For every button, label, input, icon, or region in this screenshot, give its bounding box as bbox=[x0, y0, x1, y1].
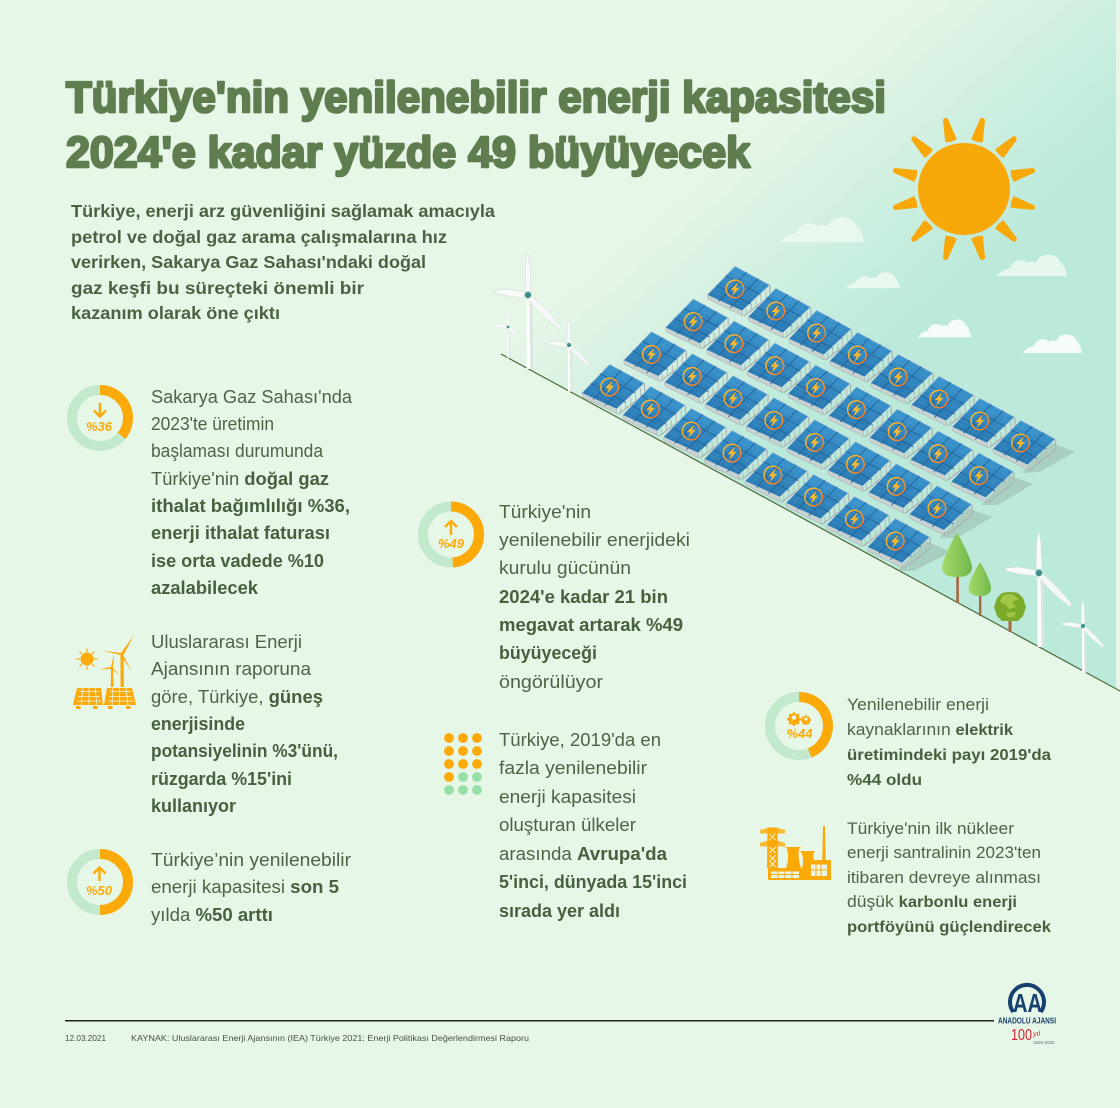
text: nuclear plant: portföyünü güçlendirecek bbox=[847, 919, 1051, 936]
donut: %44: %44 bbox=[786, 726, 813, 741]
panel shadows bbox=[897, 442, 1075, 571]
intro paragraph: kazanım olarak öne çıktı bbox=[71, 303, 280, 323]
text: 2024 forecast: megavat artarak %49 bbox=[499, 615, 683, 635]
donut: %36 bbox=[72, 390, 128, 446]
text: 2019 ranking: Türkiye, 2019'da en bbox=[499, 730, 661, 750]
text: 2019 ranking: sırada yer aldı bbox=[499, 901, 620, 921]
clouds bbox=[781, 217, 1082, 353]
intro paragraph: verirken, Sakarya Gaz Sahası'ndaki doğal bbox=[71, 252, 426, 272]
text: 2024 forecast: Türkiye'nin bbox=[499, 502, 591, 522]
text: 2024 forecast bbox=[499, 502, 690, 692]
logo: Anadolu Ajansi: 100 bbox=[1011, 1027, 1032, 1044]
donut: %49 bbox=[423, 506, 479, 562]
text: wind and solar potential: göre, Türkiye, güneş bbox=[151, 687, 323, 707]
donut: %50: %50 bbox=[86, 883, 113, 898]
logo: Anadolu Ajansi: yıl bbox=[1032, 1031, 1040, 1038]
footer rule bbox=[65, 1020, 994, 1022]
text: natural gas: başlaması durumunda bbox=[151, 441, 324, 461]
text: natural gas: ithalat bağımlılığı %36, bbox=[151, 496, 350, 516]
icon: dot matrix bbox=[444, 733, 482, 795]
intro paragraph: Türkiye, enerji arz güvenliğini sağlamak amacıyla bbox=[71, 201, 495, 221]
donut: %36: %36 bbox=[86, 419, 113, 434]
text: 2019 ranking: 5'inci, dünyada 15'inci bbox=[499, 872, 687, 892]
text: nuclear plant: Türkiye'nin ilk nükleer bbox=[847, 819, 1014, 838]
text: wind and solar potential: potansiyelinin %3'ünü, bbox=[151, 741, 338, 761]
right edge strip bbox=[1116, 0, 1120, 1108]
text: natural gas bbox=[151, 387, 353, 598]
text: electricity share: üretimindeki payı 2019'da bbox=[847, 747, 1051, 764]
title: 2024'e kadar yüzde 49 büyüyecek bbox=[66, 128, 751, 177]
text: wind and solar potential: Ajansının raporuna bbox=[151, 659, 312, 679]
text: wind and solar potential bbox=[151, 632, 338, 816]
text: 2019 ranking: enerji kapasitesi bbox=[499, 787, 636, 807]
text: natural gas: ise orta vadede %10 bbox=[151, 551, 324, 571]
intro paragraph: petrol ve doğal gaz arama çalışmalarına hız bbox=[71, 227, 447, 247]
text: natural gas: azalabilecek bbox=[151, 578, 259, 598]
text: 2019 ranking bbox=[499, 730, 687, 921]
donut: %49: %49 bbox=[438, 536, 465, 551]
wind turbines left bbox=[494, 255, 590, 392]
text: wind and solar potential: Uluslararası Enerji bbox=[151, 632, 302, 652]
donut: %44 bbox=[770, 697, 828, 755]
text: nuclear plant: düşük karbonlu enerji bbox=[847, 892, 1017, 911]
title bbox=[66, 73, 886, 177]
text: electricity share: %44 oldu bbox=[847, 772, 922, 789]
text: nuclear plant bbox=[847, 819, 1051, 936]
text: wind and solar potential: kullanıyor bbox=[151, 796, 236, 816]
text: electricity share: kaynaklarının elektrik bbox=[847, 720, 1013, 739]
text: 2019 ranking: fazla yenilenebilir bbox=[499, 758, 647, 778]
sun bbox=[891, 116, 1037, 262]
wind turbines right bbox=[1006, 533, 1104, 673]
donut: %50 bbox=[72, 854, 128, 910]
text: capacity growth: enerji kapasitesi son 5 bbox=[151, 877, 339, 897]
trees bbox=[942, 533, 1026, 632]
text: nuclear plant: itibaren devreye alınması bbox=[847, 868, 1041, 887]
text: electricity share bbox=[847, 695, 1051, 789]
logo: Anadolu Ajansi: ANADOLU AJANSI bbox=[998, 1016, 1056, 1026]
text: electricity share: Yenilenebilir enerji bbox=[847, 695, 989, 714]
text: 2019 ranking: arasında Avrupa'da bbox=[499, 844, 668, 864]
intro paragraph: gaz keşfi bu süreçteki önemli bir bbox=[71, 278, 364, 298]
text: natural gas: Türkiye'nin doğal gaz bbox=[151, 469, 329, 489]
text: natural gas: 2023'te üretimin bbox=[151, 414, 274, 434]
text: capacity growth bbox=[151, 850, 351, 925]
title: Türkiye'nin yenilenebilir enerji kapasitesi bbox=[66, 73, 886, 122]
text: 2024 forecast: 2024'e kadar 21 bin bbox=[499, 587, 668, 607]
text: wind and solar potential: rüzgarda %15'ini bbox=[151, 769, 292, 789]
icon: nuclear plant bbox=[760, 826, 831, 880]
footer date: 12.03.2021 bbox=[65, 1033, 106, 1043]
text: capacity growth: yılda %50 arttı bbox=[151, 905, 273, 925]
text: natural gas: enerji ithalat faturası bbox=[151, 523, 330, 543]
text: 2024 forecast: öngörülüyor bbox=[499, 672, 603, 692]
text: 2024 forecast: yenilenebilir enerjideki bbox=[499, 530, 690, 550]
text: 2019 ranking: oluşturan ülkeler bbox=[499, 815, 636, 835]
text: 2024 forecast: büyüyeceği bbox=[499, 643, 597, 663]
text: 2024 forecast: kurulu gücünün bbox=[499, 558, 631, 578]
solar panel array bbox=[582, 266, 1056, 568]
footer source: KAYNAK: Uluslararası Enerji Ajansının (IEA) Türkiye 2021: Enerji Politikası Değerlendirmesi Raporu bbox=[131, 1033, 529, 1043]
intro paragraph bbox=[71, 201, 495, 323]
icon: solar and wind bbox=[73, 635, 136, 709]
logo: Anadolu Ajansi: AA bbox=[1013, 988, 1042, 1018]
hillside ground bbox=[0, 354, 1120, 1108]
logo: Anadolu Ajansi bbox=[998, 985, 1056, 1045]
logo: Anadolu Ajansi: 1920-2020 bbox=[1033, 1040, 1055, 1045]
text: nuclear plant: enerji santralinin 2023'ten bbox=[847, 843, 1041, 862]
text: wind and solar potential: enerjisinde bbox=[151, 714, 245, 734]
text: capacity growth: Türkiye’nin yenilenebilir bbox=[151, 850, 351, 870]
text: natural gas: Sakarya Gaz Sahası'nda bbox=[151, 387, 353, 407]
